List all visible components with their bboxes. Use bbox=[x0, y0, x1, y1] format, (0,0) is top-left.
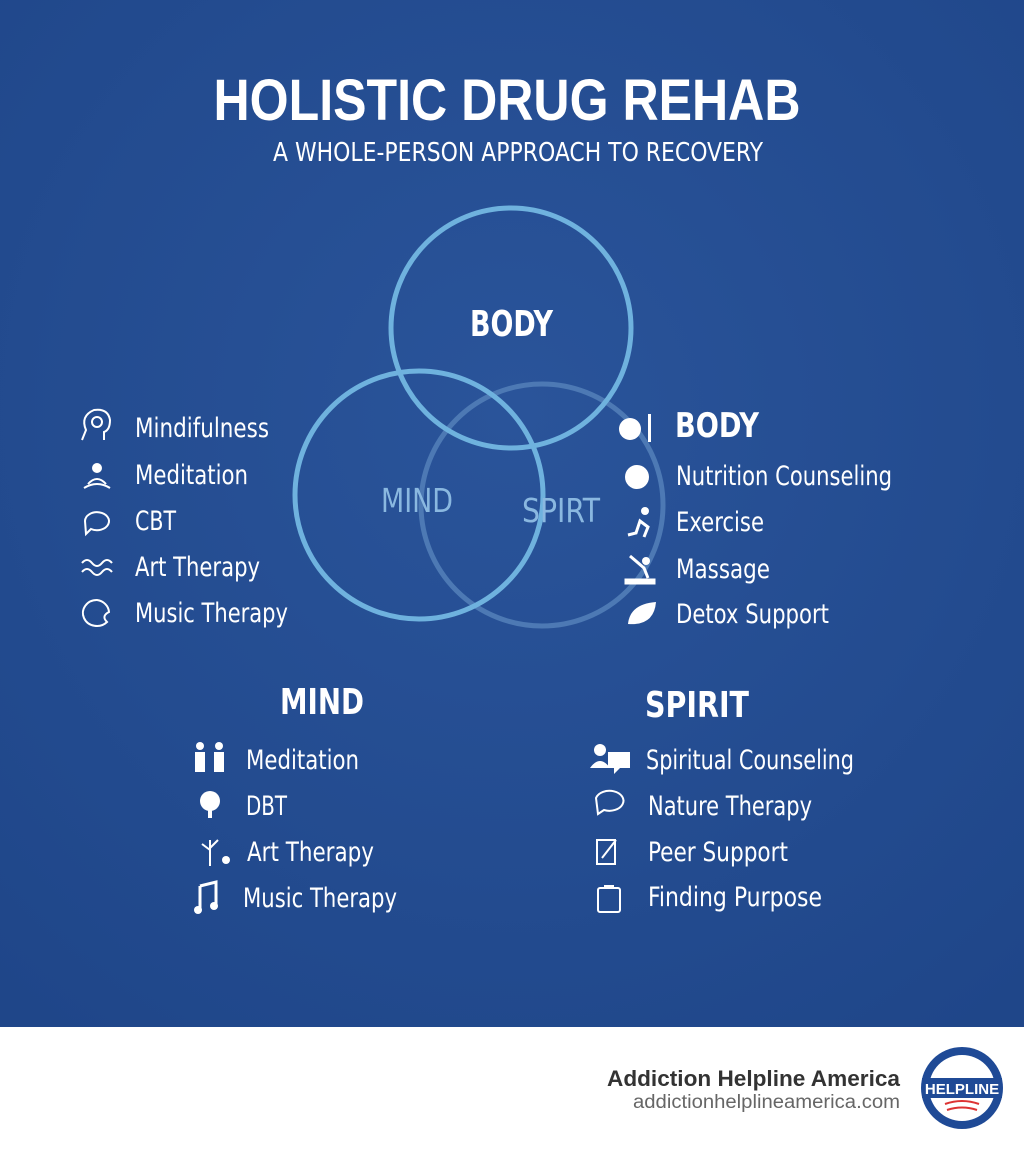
logo badge bbox=[921, 1047, 1003, 1129]
venn diagram bbox=[295, 208, 663, 626]
footer brand text bbox=[607, 1066, 901, 1113]
list: left mind items: CBT bbox=[135, 506, 176, 537]
footer brand text: addictionhelplineamerica.com bbox=[633, 1092, 900, 1113]
venn diagram: BODY bbox=[470, 304, 553, 345]
footer brand text: Addiction Helpline America bbox=[607, 1066, 901, 1091]
heading: SPIRIT: SPIRIT bbox=[645, 685, 749, 726]
list: spirit items: Finding Purpose bbox=[648, 882, 822, 913]
list: right body items: Exercise bbox=[676, 507, 764, 538]
list: spirit items: Spiritual Counseling bbox=[646, 745, 854, 776]
list: spirit items bbox=[590, 744, 854, 913]
list: right body items: Massage bbox=[676, 554, 770, 585]
list: right body items: Nutrition Counseling bbox=[676, 461, 892, 492]
title: HOLISTIC DRUG REHAB bbox=[214, 68, 800, 133]
heading: MIND: MIND bbox=[280, 682, 364, 723]
venn diagram: SPIRT bbox=[522, 491, 601, 530]
list: spirit items: Peer Support bbox=[648, 837, 788, 868]
list: mind items: Meditation bbox=[246, 745, 359, 776]
list: left mind items: Meditation bbox=[135, 460, 248, 491]
subtitle: A WHOLE-PERSON APPROACH TO RECOVERY bbox=[273, 138, 764, 168]
logo badge: HELPLINE bbox=[925, 1081, 999, 1098]
list: mind items: Art Therapy bbox=[247, 837, 374, 868]
list: right body items bbox=[619, 406, 892, 630]
list: mind items: DBT bbox=[246, 791, 287, 822]
list: left mind items: Mindifulness bbox=[135, 413, 269, 444]
icons body bbox=[619, 418, 641, 440]
list: mind items: Music Therapy bbox=[243, 883, 397, 914]
list: left mind items: Art Therapy bbox=[135, 552, 260, 583]
list: left mind items: Music Therapy bbox=[135, 598, 288, 629]
list: spirit items: Nature Therapy bbox=[648, 791, 812, 822]
list: right body items: BODY bbox=[675, 406, 760, 446]
venn diagram: MIND bbox=[381, 481, 453, 520]
list: right body items: Detox Support bbox=[676, 599, 829, 630]
list: mind items bbox=[194, 742, 397, 914]
list: left mind items bbox=[82, 410, 288, 629]
